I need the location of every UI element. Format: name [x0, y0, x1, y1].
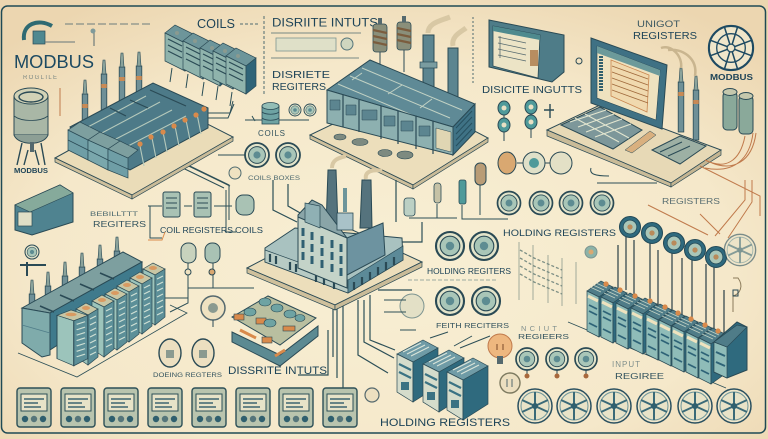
label: left registers: REGITERS — [93, 220, 146, 229]
round icons lower — [384, 280, 500, 318]
icon: small sensor — [585, 246, 597, 258]
round icons — [436, 232, 498, 260]
label: registers top: REGISTERS — [633, 30, 697, 42]
small sketch — [591, 168, 657, 183]
label: discrete registers line 2: REGITERS — [272, 81, 326, 93]
label: COILS: COILS — [258, 129, 285, 138]
back rail — [22, 252, 142, 350]
icon: bracket — [733, 278, 741, 312]
oval sensors — [159, 339, 214, 367]
heading: COILS: COILS — [197, 17, 235, 31]
label: coils: COILS — [235, 225, 263, 235]
label: holding registers bottom: HOLDING REGISTERS — [380, 417, 510, 429]
label: coils boxes: COILS BOXES — [248, 175, 301, 182]
panel: laptop — [547, 38, 760, 238]
key stack — [232, 296, 318, 366]
panel: right register bank — [568, 216, 747, 388]
smokestacks — [420, 17, 466, 100]
label: registers right: REGISTERS — [662, 196, 720, 206]
label: input faint: INPUT — [612, 360, 640, 369]
back module row — [70, 83, 208, 170]
sensors under coil registers — [148, 232, 254, 312]
wires to right — [158, 101, 234, 220]
panel: coil modules — [165, 25, 256, 106]
icon: wheel emblem — [709, 26, 753, 70]
label: coil registers: COIL REGISTERS — [160, 225, 233, 235]
panel: small monitor — [473, 17, 582, 83]
platform — [310, 92, 488, 189]
gauges on stems — [620, 216, 726, 268]
valve — [20, 245, 46, 276]
stems — [618, 235, 724, 340]
label: unigot: UNIGOT — [637, 19, 680, 30]
icon: bulb — [488, 334, 512, 364]
platform parts — [334, 134, 413, 159]
wires — [648, 133, 760, 238]
label: left registers title: BEBILLTTT — [90, 212, 139, 218]
platform — [247, 222, 422, 310]
coil register devices — [148, 190, 254, 238]
front module blocks — [68, 122, 138, 178]
schematic strip — [240, 16, 361, 96]
control panels row — [17, 388, 357, 427]
label: holding registers mid: HOLDING REGITERS — [427, 267, 511, 276]
title: MODBUS with gauge icon — [14, 22, 153, 81]
label: feith registers: FEITH RECITERS — [436, 321, 509, 330]
heading: discrete inputs: DISRIITE INTUTS — [272, 18, 378, 30]
tower — [298, 200, 385, 288]
icon: cylinders — [723, 88, 753, 134]
keyboard — [561, 107, 656, 153]
label: discrete registers: DISRIETE — [272, 69, 330, 81]
roof — [327, 60, 475, 127]
label: MODBUS emblem: MODBUS — [710, 72, 753, 82]
dark side — [453, 104, 475, 155]
front faces — [327, 90, 453, 155]
gauge — [201, 296, 225, 327]
chimneys — [82, 52, 142, 144]
modules — [587, 281, 725, 384]
panel: coils drum — [245, 102, 316, 124]
panel: left registers bank — [18, 237, 187, 377]
label: holding registers upper: HOLDING REGISTERS — [503, 228, 616, 239]
wires — [273, 180, 422, 410]
panel: device left — [15, 185, 73, 235]
stacks with smoke — [652, 47, 706, 164]
coil cluster — [519, 242, 576, 306]
chimneys — [29, 237, 120, 344]
label: input registers: NCIUT — [521, 324, 557, 333]
barrel tank — [14, 88, 60, 165]
big front box — [22, 308, 50, 357]
panel: centre factory — [247, 156, 422, 410]
caption: ROGLILE — [23, 75, 57, 81]
gauges row — [218, 143, 300, 179]
screen — [591, 38, 667, 129]
platform — [55, 100, 233, 199]
wheels row — [518, 389, 751, 423]
building modules — [327, 60, 475, 155]
icon: light wheel — [724, 234, 756, 266]
icon: coin — [500, 373, 520, 393]
platform — [18, 305, 187, 377]
front module — [714, 322, 747, 378]
module row — [57, 263, 165, 366]
label: regiree: REGIREE — [615, 371, 664, 381]
base line — [568, 322, 726, 388]
heading: MODBUS: MODBUS — [14, 52, 94, 72]
circuit icons row — [404, 163, 614, 219]
icon: arc gauge — [24, 22, 153, 46]
coil cylinders — [373, 16, 411, 74]
label: input registers line 2: REGIEERS — [518, 332, 569, 341]
label: doeing registers: DOEING REGTERS — [153, 372, 223, 379]
panel: left factory board — [55, 52, 234, 220]
input icons — [516, 348, 597, 378]
panel: three servers — [397, 330, 490, 420]
lower base — [265, 228, 403, 293]
icon: numbered coin — [365, 388, 379, 402]
base — [547, 105, 721, 187]
chimneys with smoke — [326, 156, 382, 228]
panel: top centre factory — [310, 16, 488, 189]
sensors — [498, 100, 572, 174]
label: small MODBUS: MODBUS — [14, 168, 48, 175]
label: discrete inputs lower: DISSRITE INTUTS — [228, 365, 327, 377]
label: discrete inputs: DISICITE INGUTTS — [482, 85, 582, 96]
